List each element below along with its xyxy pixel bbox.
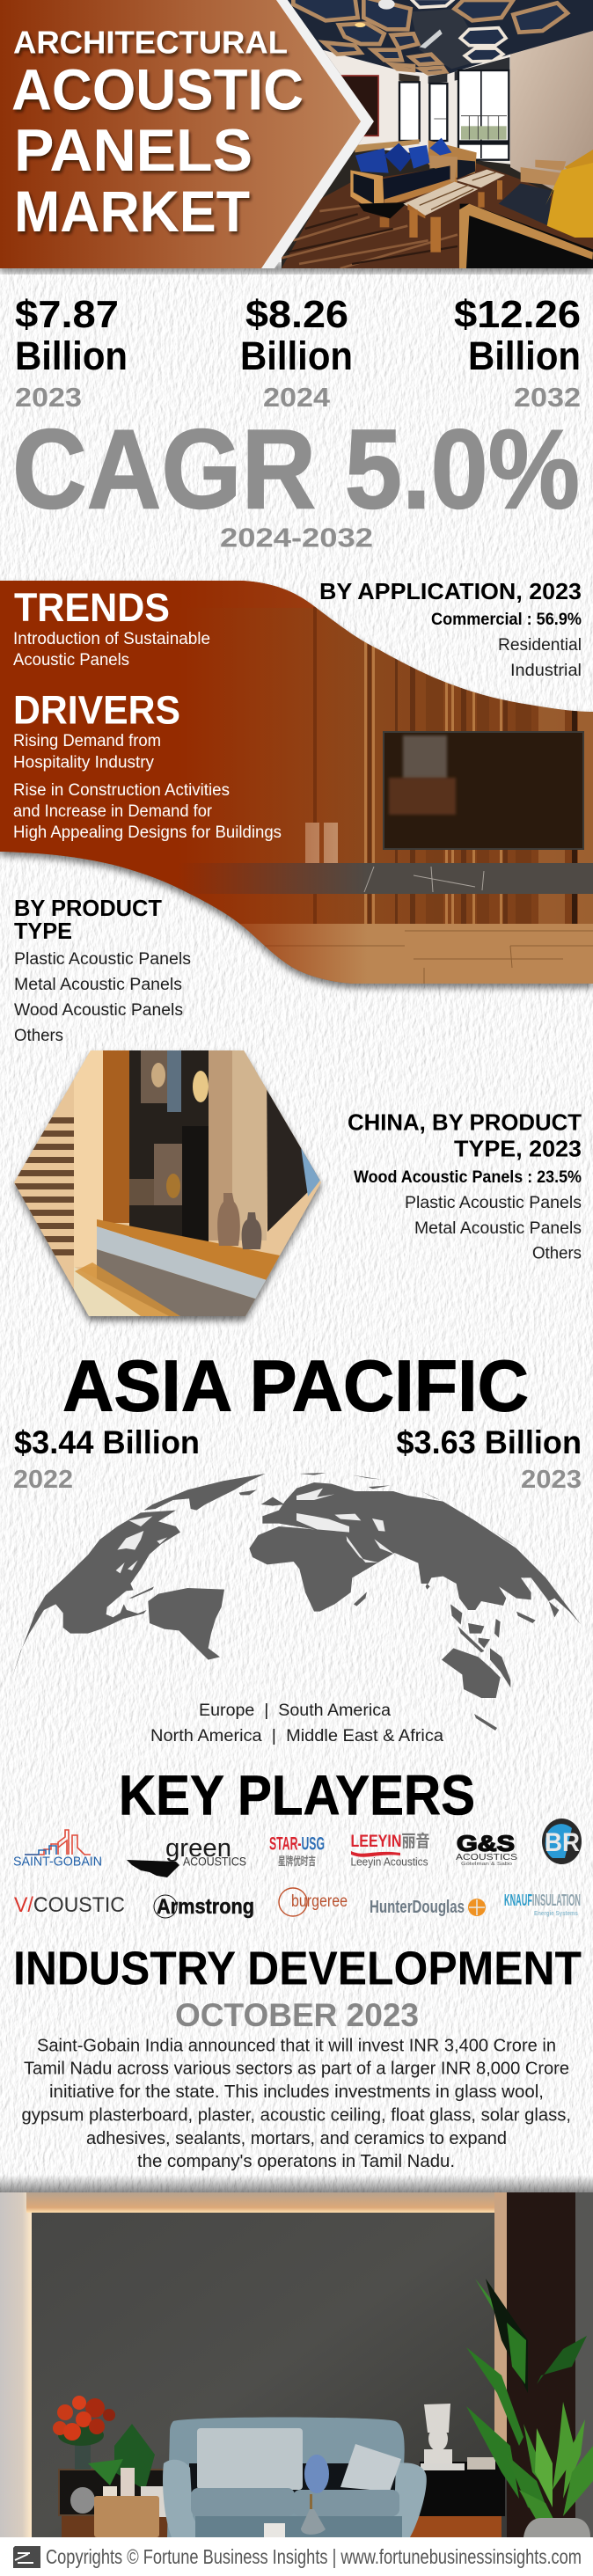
drivers text: Hospitality Industry	[13, 753, 154, 772]
industry development paragraph: Saint-Gobain India announced that it will invest INR 3,400 Crore in	[37, 2036, 556, 2055]
logo: hunter douglas: HunterDouglas	[370, 1898, 465, 1917]
china by product type: CHINA, BY PRODUCT	[348, 1109, 582, 1135]
drivers text: and Increase in Demand for	[13, 802, 213, 821]
industry development paragraph: adhesives, sealants, mortars, and ceramics to expand	[86, 2129, 507, 2148]
regions list	[150, 1701, 443, 1745]
trends text	[13, 585, 210, 670]
china by product type: Metal Acoustic Panels	[414, 1219, 582, 1238]
logo: knauf insulation	[504, 1892, 581, 1917]
asia pacific values: $3.63 Billion	[396, 1424, 582, 1460]
logos	[13, 1819, 582, 1919]
regions list: Europe | South America	[199, 1701, 391, 1720]
logo: leeyin acoustics: LEEYIN丽音	[350, 1831, 429, 1851]
logo: vicoustic: V/COUSTIC	[14, 1893, 125, 1917]
date: OCTOBER 2023	[175, 1997, 419, 2033]
by application: Industrial	[510, 662, 582, 680]
header banner	[0, 0, 593, 273]
asia pacific values	[13, 1424, 582, 1494]
by product type: BY PRODUCT	[14, 895, 162, 921]
title: ARCHITECTURAL	[13, 25, 288, 60]
footer	[0, 2537, 593, 2576]
stat 2024: $8.26	[245, 293, 348, 336]
by product type: Metal Acoustic Panels	[14, 976, 182, 994]
industry development paragraph: gypsum plasterboard, plaster, acoustic ceiling, float glass, solar glass,	[21, 2106, 571, 2126]
wooden stump	[94, 2496, 159, 2537]
stat 2024: 2024	[263, 382, 331, 413]
logo: g&s acoustics: ACOUSTICS	[456, 1853, 517, 1862]
logo: br: BR	[545, 1828, 580, 1857]
drivers text: Rise in Construction Activities	[13, 781, 230, 800]
logo: green acoustics: green	[165, 1834, 231, 1862]
wooden floor	[239, 924, 593, 984]
map: new zealand	[474, 1714, 497, 1731]
stat 2032: Billion	[468, 333, 581, 378]
stat 2023: Billion	[15, 333, 128, 378]
logo: saint-gobain: SAINT-GOBAIN	[13, 1855, 102, 1869]
drivers text: High Appealing Designs for Buildings	[13, 823, 282, 842]
stat 2032: $12.26	[454, 293, 581, 336]
china by product type: Wood Acoustic Panels : 23.5%	[354, 1168, 582, 1187]
red flowers	[53, 2396, 115, 2470]
logo: g&s acoustics: G&S	[457, 1832, 515, 1856]
stat 2032	[454, 293, 581, 413]
stat 2024	[240, 293, 353, 413]
by product type: TYPE	[14, 918, 72, 944]
asia pacific values: $3.44 Billion	[14, 1424, 200, 1460]
by application	[319, 578, 582, 680]
logo: saint-gobain	[13, 1830, 102, 1869]
bust sculpture	[424, 2404, 452, 2463]
logo: star-usg: 星牌优时吉	[278, 1855, 316, 1868]
china by product type: TYPE, 2023	[454, 1135, 582, 1161]
logo: leeyin acoustics: Leeyin Acoustics	[350, 1855, 428, 1869]
stat 2023: 2023	[15, 382, 82, 413]
CAGR: 2024-2032	[220, 523, 373, 553]
stat 2024: Billion	[240, 333, 353, 378]
drivers text: DRIVERS	[13, 688, 180, 732]
by application: Residential	[498, 636, 582, 655]
industry development paragraph	[21, 2036, 571, 2171]
by product type: Plastic Acoustic Panels	[14, 950, 191, 969]
china by product type	[348, 1109, 582, 1263]
map: africa, eurasia and oceania	[249, 1473, 581, 1698]
asia pacific heading: ASIA PACIFIC	[62, 1344, 529, 1427]
stone console	[176, 863, 593, 894]
industry development paragraph: initiative for the state. This includes investments in glass wool,	[49, 2082, 544, 2102]
logo: star-usg	[269, 1833, 325, 1868]
hexagon interior photo	[0, 1047, 334, 1321]
console and led glow	[59, 2457, 505, 2537]
stat 2023	[15, 293, 128, 413]
vases on console	[305, 823, 338, 865]
china by product type: Others	[532, 1244, 582, 1263]
logo: g&s acoustics	[456, 1832, 517, 1867]
map: americas and greenland	[11, 1474, 284, 1679]
logo: knauf insulation: Energie Systems	[534, 1911, 578, 1917]
asia pacific values: 2023	[521, 1466, 582, 1494]
by application: Commercial : 56.9%	[431, 611, 582, 629]
icon: fortune business insights logo	[13, 2546, 40, 2568]
logo: green acoustics: ACOUSTICS	[183, 1855, 246, 1869]
market size stats	[15, 293, 581, 413]
drivers text: Rising Demand from	[13, 732, 161, 750]
regions list: North America | Middle East & Africa	[150, 1727, 443, 1745]
world map	[11, 1473, 581, 1731]
by product type	[14, 895, 191, 1045]
logo: green acoustics	[127, 1834, 246, 1877]
logo: star-usg: STAR-USG	[269, 1833, 325, 1855]
logo: burgeree: burgeree	[291, 1892, 348, 1911]
logo: armstrong: Armstrong	[157, 1895, 254, 1919]
key players heading: KEY PLAYERS	[119, 1763, 475, 1826]
trends text: Introduction of Sustainable	[13, 630, 210, 648]
logo: leeyin acoustics	[350, 1831, 429, 1869]
blue flower, glass vase and cup	[264, 2455, 329, 2537]
potted plant	[506, 2402, 593, 2537]
panel: trends and drivers wave with wood wall photo	[0, 581, 593, 988]
by product type: Others	[14, 1027, 63, 1045]
title	[11, 25, 304, 244]
green plant and vases	[70, 2424, 167, 2517]
sofa	[163, 2418, 427, 2537]
stat 2032: 2032	[514, 382, 581, 413]
trends text: TRENDS	[14, 585, 170, 630]
china by product type: Plastic Acoustic Panels	[405, 1194, 582, 1212]
logo: burgeree	[279, 1888, 348, 1916]
brown title panel	[0, 0, 361, 268]
header photo: lounge with hexagonal acoustic ceiling	[282, 0, 593, 268]
title: PANELS	[14, 117, 253, 184]
wall-mounted TV	[384, 732, 583, 849]
title: ACOUSTIC	[11, 56, 304, 121]
bottom interior photo	[0, 2175, 593, 2537]
industry development paragraph: the company's operatons in Tamil Nadu.	[137, 2152, 455, 2171]
asia pacific values: 2022	[13, 1466, 73, 1494]
vases	[217, 1193, 261, 1249]
logo: br	[542, 1819, 582, 1864]
stat 2023: $7.87	[15, 293, 119, 336]
title: MARKET	[14, 179, 250, 244]
trends text: Acoustic Panels	[13, 651, 129, 670]
by application: BY APPLICATION, 2023	[319, 578, 582, 604]
tall plant	[466, 2279, 587, 2499]
industry development paragraph: Tamil Nadu across various sectors as part of a larger INR 8,000 Crore	[24, 2059, 569, 2078]
logo: g&s acoustics: Gotelman & Sabo	[461, 1862, 512, 1867]
drivers text	[13, 688, 282, 842]
by product type: Wood Acoustic Panels	[14, 1001, 183, 1020]
